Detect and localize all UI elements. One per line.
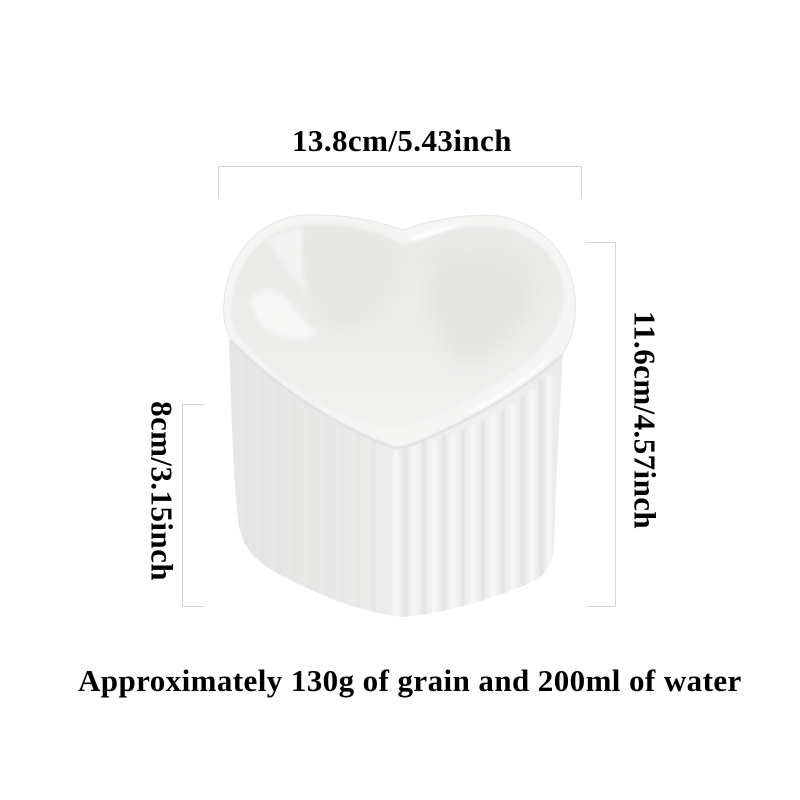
width label: 13.8cm/5.43inch	[292, 123, 512, 158]
dimension bracket: total height	[586, 242, 616, 606]
rim lower shadow	[230, 340, 562, 447]
dimension bracket: width	[218, 166, 582, 199]
rim front highlight	[470, 360, 548, 412]
capacity caption: Approximately 130g of grain and 200ml of water	[78, 663, 742, 698]
body height label: 8cm/3.15inch	[144, 401, 180, 581]
bowl body	[229, 340, 563, 617]
heart-shaped ribbed white bowl	[224, 215, 575, 620]
dimension bracket: body height	[182, 404, 204, 606]
interior shading and reflections	[303, 231, 396, 330]
total height label: 11.6cm/4.57inch	[628, 311, 662, 529]
vertical ribs	[394, 376, 551, 617]
bowl interior	[231, 224, 564, 428]
rim outer	[224, 215, 575, 447]
